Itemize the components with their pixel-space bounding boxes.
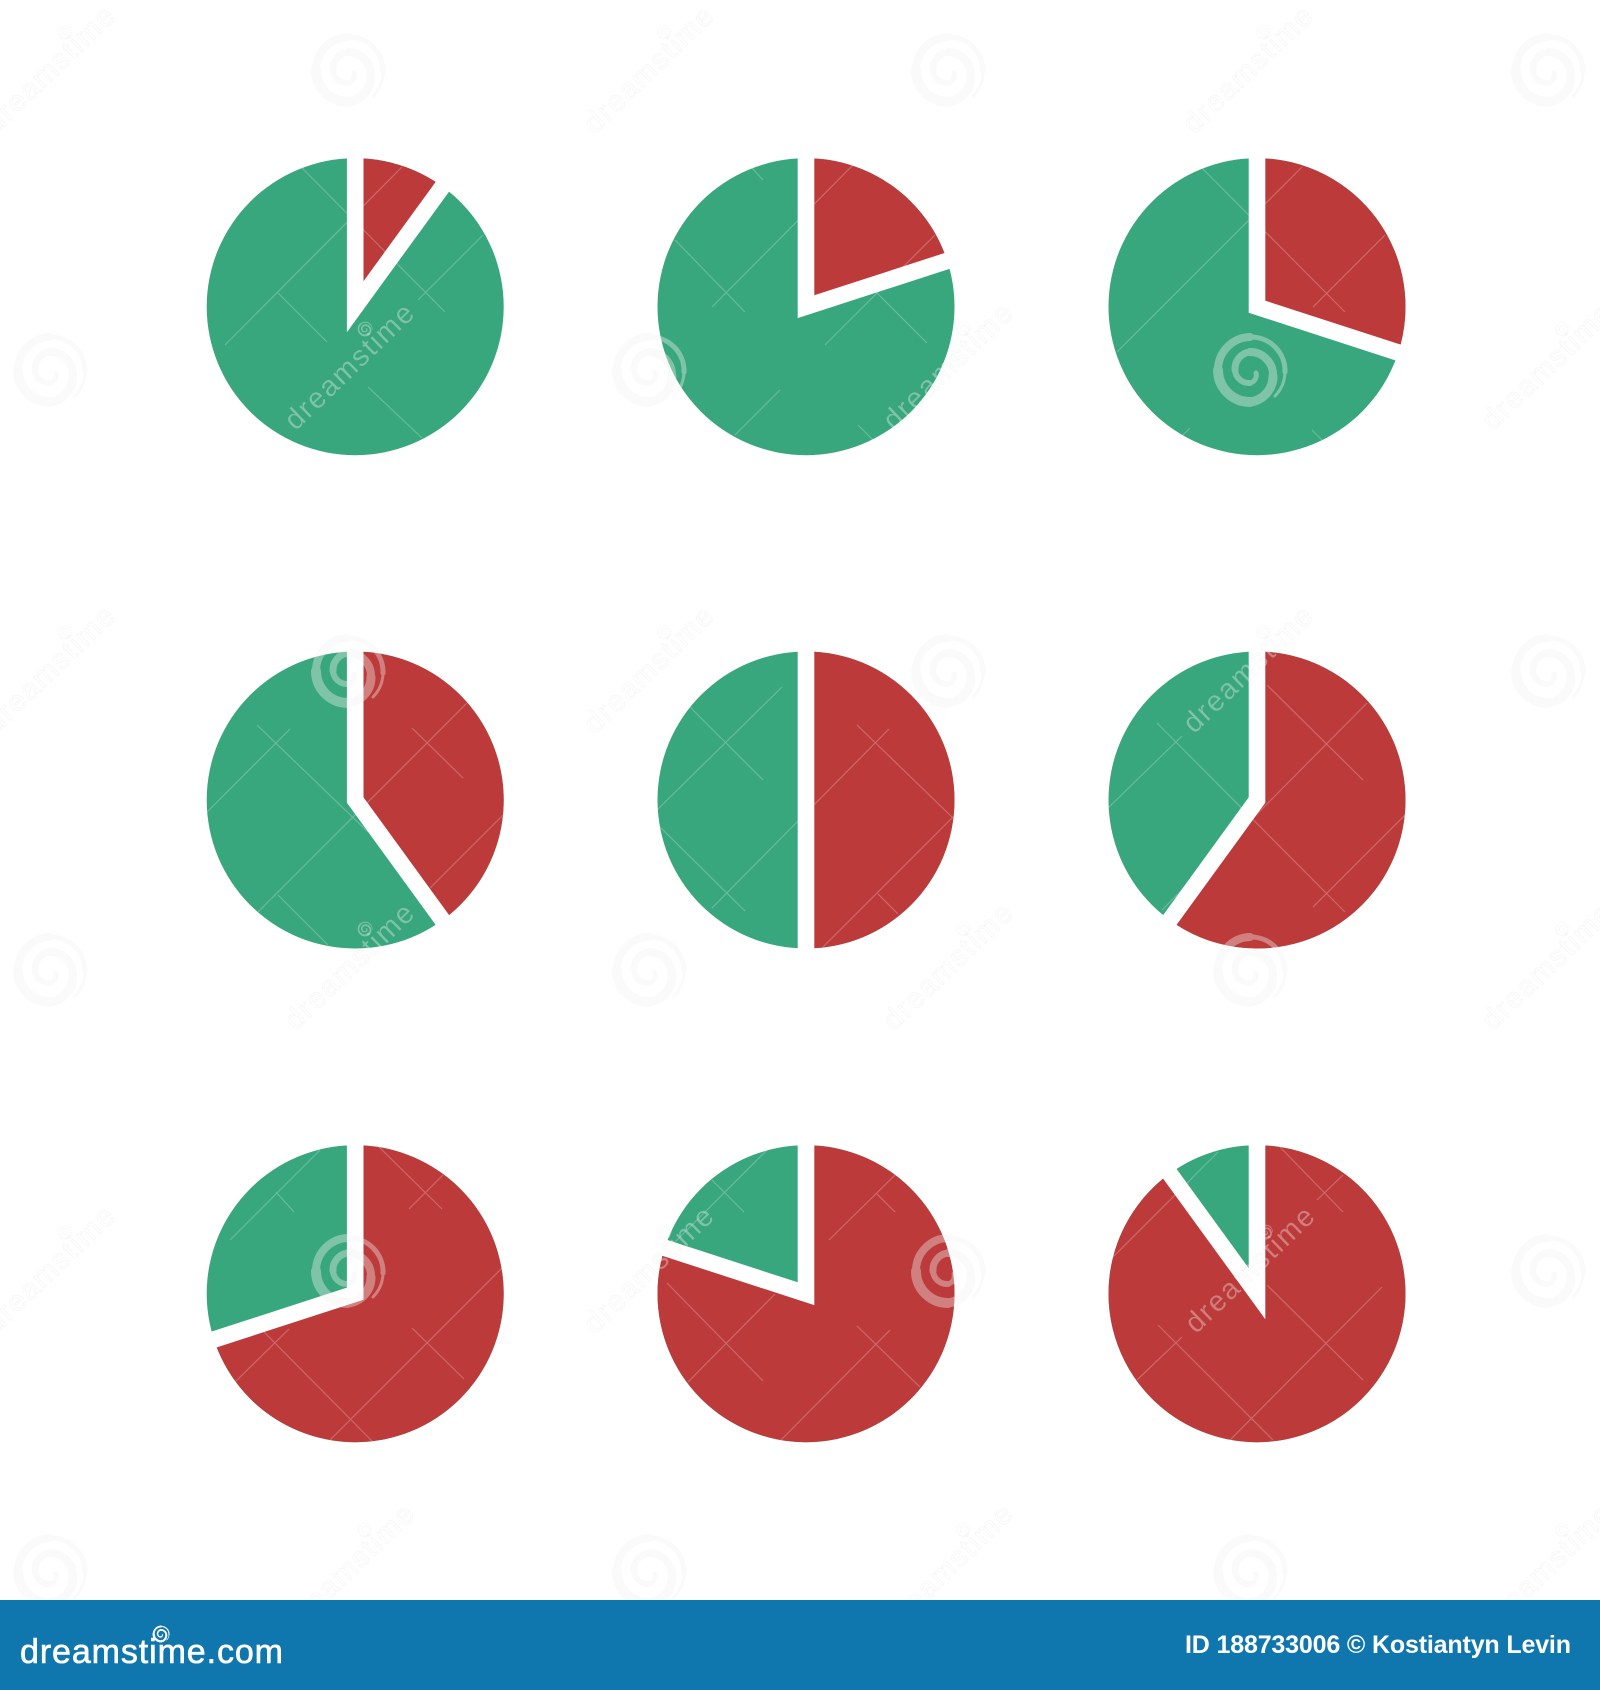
pie chart: 20 percent red xyxy=(658,137,968,455)
watermark text: dreamstime xyxy=(1179,1200,1321,1340)
icon: logo spiral xyxy=(154,1626,169,1641)
watermark text: dreamstime xyxy=(578,600,720,740)
pie chart: 90 percent red xyxy=(1108,1124,1406,1442)
watermark text: dreamstime xyxy=(877,1498,1019,1638)
watermark text: dreamstime xyxy=(278,897,421,1037)
watermark text: dreamstime xyxy=(278,1498,421,1638)
watermark text: dreamstime xyxy=(1177,0,1319,140)
pie chart: 60 percent red xyxy=(1108,630,1406,948)
watermark mesh lines xyxy=(207,165,1405,1441)
watermark text: dreamstime xyxy=(278,297,421,437)
watermark text: dreamstime xyxy=(877,297,1019,437)
pie chart: 70 percent red xyxy=(194,1124,504,1442)
footer logo text: dreamstime.com xyxy=(20,1633,283,1671)
pie chart: 10 percent red xyxy=(207,137,504,455)
watermark text: dreamstime xyxy=(578,1200,720,1340)
pie chart: 30 percent red xyxy=(1108,137,1419,455)
pie chart: 80 percent red xyxy=(644,1124,955,1442)
footer credit text: ID 188733006 © Kostiantyn Levin xyxy=(1185,1631,1571,1659)
pie chart: 40 percent red xyxy=(207,630,504,948)
watermark text: dreamstime xyxy=(877,897,1019,1037)
pie chart: 50 percent red xyxy=(658,630,954,970)
watermark text: dreamstime xyxy=(1177,600,1319,740)
footer bar xyxy=(0,1600,1600,1690)
watermark text: dreamstime xyxy=(578,0,720,140)
